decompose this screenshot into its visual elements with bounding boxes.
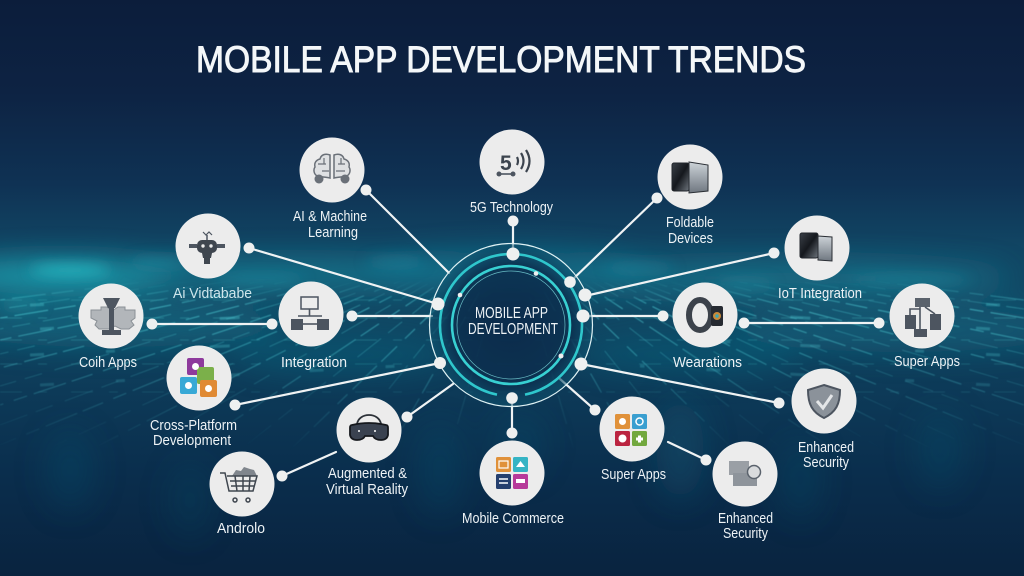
hub label bbox=[468, 305, 558, 338]
icon: shield bbox=[808, 385, 840, 418]
label: Mobile Commerce bbox=[462, 510, 564, 527]
icon: platform tiles bbox=[180, 358, 217, 397]
icon: VR headset bbox=[350, 415, 388, 440]
label: 5G Technology bbox=[470, 199, 553, 216]
node: Coih Apps bbox=[78, 284, 144, 371]
icon: connected modules bbox=[905, 298, 941, 337]
node: 5G Technology bbox=[470, 130, 553, 216]
node: Super Apps (bottom) bbox=[600, 396, 666, 483]
icon: smartwatch bbox=[689, 300, 723, 330]
icon: network screens bbox=[291, 297, 329, 330]
node: AI & Machine Learning bbox=[293, 138, 367, 241]
hub label: MOBILE APP bbox=[475, 305, 548, 322]
label: Devices bbox=[668, 230, 713, 247]
label: Foldable bbox=[666, 214, 714, 231]
icon: payment cards bbox=[729, 461, 760, 486]
label: Wearations bbox=[673, 354, 742, 371]
label: Development bbox=[153, 432, 232, 449]
icon: foldable phone bbox=[672, 162, 708, 193]
label: Security bbox=[723, 525, 768, 542]
node: IoT Integration bbox=[778, 216, 862, 302]
icon: commerce tiles bbox=[496, 457, 528, 489]
node: Augmented & Virtual Reality bbox=[326, 398, 408, 498]
title: MOBILE APP DEVELOPMENT TRENDS bbox=[196, 39, 806, 80]
node: Ai Vidtababe bbox=[173, 214, 252, 302]
node: Wearations bbox=[672, 282, 742, 371]
node: Enhanced Security (bottom) bbox=[712, 442, 778, 542]
icon: app tiles bbox=[615, 414, 647, 446]
label bbox=[666, 214, 714, 247]
label: Integration bbox=[281, 354, 347, 371]
node: Foldable Devices bbox=[658, 144, 722, 247]
hub label: DEVELOPMENT bbox=[468, 321, 558, 338]
node: Integration bbox=[278, 282, 347, 371]
icon: puzzle and trophy bbox=[91, 298, 135, 335]
label: AI & Machine bbox=[293, 208, 367, 225]
label bbox=[150, 417, 237, 449]
label: Augmented & bbox=[328, 465, 407, 482]
connector lines bbox=[151, 190, 879, 476]
label: Super Apps bbox=[894, 353, 960, 370]
icon: robot bbox=[189, 232, 225, 264]
label: Coih Apps bbox=[79, 354, 137, 371]
label: Enhanced bbox=[798, 439, 854, 456]
label: Ai Vidtababe bbox=[173, 285, 252, 302]
label: Enhanced bbox=[718, 510, 773, 527]
label: Cross-Platform bbox=[150, 417, 237, 434]
label: Androlo bbox=[217, 520, 265, 537]
label bbox=[293, 208, 367, 241]
label: IoT Integration bbox=[778, 285, 862, 302]
label: Super Apps bbox=[601, 466, 666, 483]
icon: shopping cart bbox=[220, 467, 257, 502]
icon: devices bbox=[800, 233, 832, 261]
label: Virtual Reality bbox=[326, 481, 408, 498]
central hub: mobile app development bbox=[430, 244, 592, 406]
background: circuit board lines bbox=[0, 284, 1024, 434]
node: Super Apps (right) bbox=[890, 284, 960, 370]
label bbox=[326, 465, 408, 498]
label: Learning bbox=[308, 224, 358, 241]
label bbox=[798, 439, 854, 471]
node: Androlo bbox=[210, 452, 274, 537]
node: Cross-Platform Development bbox=[150, 346, 237, 449]
label bbox=[718, 510, 773, 542]
icon: brain bbox=[314, 154, 350, 184]
label: Security bbox=[803, 454, 849, 471]
node: Enhanced Security (right) bbox=[792, 368, 856, 471]
icon: 5G signal: 5 bbox=[500, 152, 512, 175]
connector end dots bbox=[146, 184, 884, 482]
node: Mobile Commerce bbox=[462, 440, 564, 527]
